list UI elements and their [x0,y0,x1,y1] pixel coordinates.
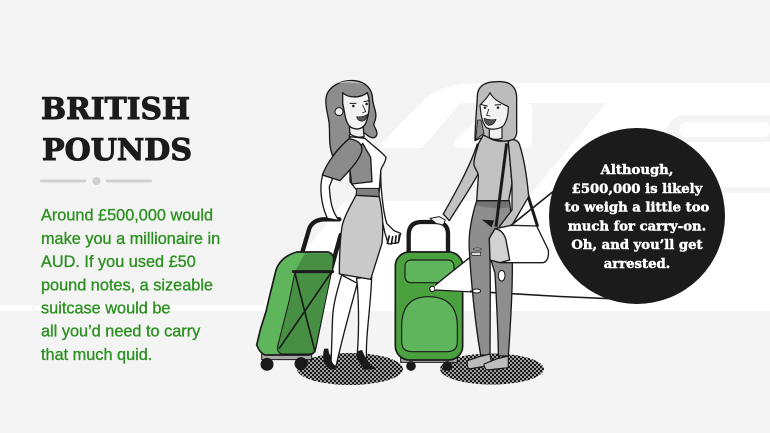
figure: bag strap front [482,143,507,227]
figure: torso [350,137,386,190]
figure: hair back [475,82,517,142]
callout pointer fill over suitcase [435,257,470,293]
body text: Around £500,000 would [41,207,213,225]
figure: legs and heels [324,275,375,369]
callout pointer edges [435,257,473,292]
callout: speech bubble: Although, [600,163,673,178]
callout: speech bubble: £500,000 is likely [572,182,703,197]
icon: shoulder bag [489,225,548,263]
figure: near arm [499,140,529,231]
figure: face [476,93,508,139]
figure: far arm and hand [378,172,401,244]
body text: suitcase would be [41,300,170,318]
figure: jeans [469,201,512,356]
shadow: first woman [297,353,403,385]
figure: jacket [322,139,372,184]
body text: all you’d need to carry [41,323,201,341]
figure: bag strap rear [525,185,538,227]
callout: speech bubble: arrested. [604,257,670,272]
title: BRITISH [41,92,190,127]
body text: AUD. If you used £50 [41,253,196,271]
title divider [40,177,152,185]
figure: sneakers [467,354,508,370]
figure: hair and head [326,81,377,156]
figure: fingers [387,235,399,244]
callout: speech bubble [549,128,725,304]
callout pointer [432,190,640,300]
illustration: woman with upright suitcase [395,82,548,370]
callout: speech bubble: Oh, and you’ll get [571,238,703,253]
icon: tilted suitcase [257,219,341,370]
callout: speech bubble: to weigh a little too [565,201,710,216]
figure: skirt [339,195,383,279]
body text: that much quid. [41,346,152,364]
title: POUNDS [42,133,192,168]
icon: upright suitcase [395,222,463,370]
figure: far arm and hand [443,144,479,221]
body text: pound notes, a sizeable [41,276,213,294]
callout anchor dot [430,286,435,292]
body text: make you a millionaire in [41,230,220,248]
shadow: second woman [440,354,544,384]
illustration: woman with tilted suitcase [257,81,401,370]
title [41,92,192,168]
figure: torso [474,135,512,201]
background: train silhouette [0,83,770,311]
figure: near arm [321,175,339,221]
callout: speech bubble: much for carry-on. [568,219,706,234]
figure: belt [356,188,379,197]
